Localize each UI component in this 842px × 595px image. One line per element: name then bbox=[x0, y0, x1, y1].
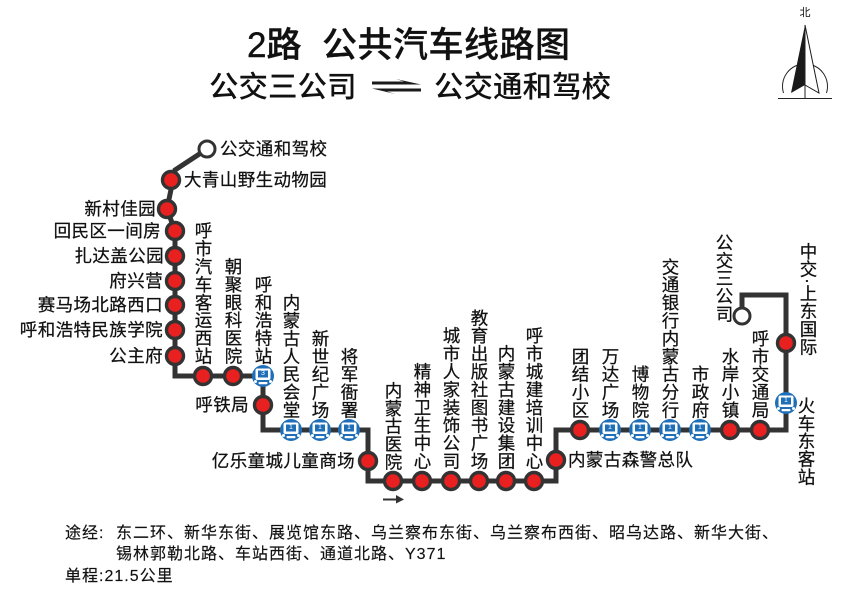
station: 万达广场: 万达广场 bbox=[600, 347, 620, 419]
station: 火车东客站: 火车东客站 bbox=[796, 396, 816, 486]
station: 内蒙古森警总队: 内蒙古森警总队 bbox=[568, 450, 693, 470]
terminal: 公交三公司: 公交三公司 bbox=[714, 234, 734, 323]
station: 中交·上东国际: 中交·上东国际 bbox=[798, 242, 818, 356]
route streets: 东二环、新华东街、展览馆东路、乌兰察布东街、乌兰察布西街、昭乌达路、新华大街、 bbox=[116, 524, 779, 542]
station: 赛马场北路西口: 赛马场北路西口 bbox=[38, 295, 163, 315]
station: 中交·上东国际 bbox=[778, 242, 818, 356]
station: 将军衙署 bbox=[338, 347, 360, 441]
station: 新世纪广场: 新世纪广场 bbox=[310, 330, 330, 419]
arrow: two-way direction bbox=[372, 79, 421, 94]
terminal: 公交三公司 bbox=[714, 234, 750, 324]
station: 新世纪广场: 1 bbox=[318, 424, 322, 431]
station: 博物院: 博物院 bbox=[630, 365, 650, 419]
station: 精神卫生中心: 精神卫生中心 bbox=[412, 363, 432, 470]
station: 教育出版社图书广场: 教育出版社图书广场 bbox=[469, 309, 489, 470]
station: 内蒙古医院: 内蒙古医院 bbox=[383, 382, 403, 471]
station: 内蒙古人民会堂: 1 bbox=[289, 424, 293, 431]
route streets: 锡林郭勒北路、车站西街、通道北路、Y371 bbox=[116, 545, 446, 563]
icon: north compass: 北 bbox=[800, 6, 810, 19]
route line bbox=[167, 149, 786, 481]
station: 大青山野生动物园: 大青山野生动物园 bbox=[184, 170, 327, 190]
icon: north compass bbox=[778, 6, 832, 99]
station: 朝聚眼科医院: 朝聚眼科医院 bbox=[223, 258, 243, 365]
title: 2路 bbox=[247, 26, 301, 65]
station: 回民区一间房: 回民区一间房 bbox=[54, 221, 161, 241]
station: 市政府 bbox=[689, 365, 711, 441]
station: 内蒙古建设集团: 内蒙古建设集团 bbox=[496, 345, 516, 470]
station: 博物院: 1 bbox=[638, 424, 642, 431]
station: 呼和浩特民族学院: 呼和浩特民族学院 bbox=[20, 320, 163, 340]
station: 公主府: 公主府 bbox=[109, 346, 163, 366]
station: 万达广场 bbox=[599, 347, 621, 441]
station: 扎达盖公园: 扎达盖公园 bbox=[74, 246, 164, 266]
station: 交通银行内蒙古分行: 1 bbox=[668, 424, 672, 431]
route streets bbox=[65, 524, 779, 563]
station: 团结小区: 团结小区 bbox=[570, 347, 590, 419]
subtitle: terminal one: 公交三公司 bbox=[209, 71, 357, 104]
station: 呼市交通局: 呼市交通局 bbox=[750, 330, 770, 419]
direction arrow bbox=[383, 495, 404, 504]
station: 火车东客站: 1 bbox=[784, 397, 788, 404]
station: 城市人家装饰公司: 城市人家装饰公司 bbox=[441, 327, 461, 470]
station: 水岸小镇: 水岸小镇 bbox=[720, 347, 740, 419]
station: 内蒙古人民会堂: 内蒙古人民会堂 bbox=[281, 294, 301, 419]
terminal: 公交通和驾校: 公交通和驾校 bbox=[220, 139, 327, 159]
station: 万达广场: 1 bbox=[608, 424, 612, 431]
station: 火车东客站 bbox=[775, 392, 816, 486]
station: 呼市汽车客运西站: 呼市汽车客运西站 bbox=[193, 222, 213, 365]
station: 府兴营: 府兴营 bbox=[109, 271, 163, 291]
subtitle: terminal two: 公交通和驾校 bbox=[434, 71, 611, 104]
station: 将军衙署: 1 bbox=[347, 424, 351, 431]
station: 呼铁局: 呼铁局 bbox=[195, 395, 249, 415]
station: 市政府: 市政府 bbox=[690, 365, 710, 419]
route streets: 途经: bbox=[65, 524, 104, 542]
station: 博物院 bbox=[629, 365, 651, 441]
station: 呼市城建培训中心: 呼市城建培训中心 bbox=[524, 327, 544, 470]
station: 交通银行内蒙古分行: 交通银行内蒙古分行 bbox=[660, 258, 680, 419]
station: 将军衙署: 将军衙署 bbox=[339, 347, 359, 419]
station: 亿乐童城儿童商场: 亿乐童城儿童商场 bbox=[212, 451, 355, 471]
station: 呼和浩特站: 呼和浩特站 bbox=[253, 276, 273, 365]
route distance: 单程:21.5公里 bbox=[65, 567, 174, 585]
title: line name: 公共汽车线路图 bbox=[322, 26, 571, 65]
station: 新村佳园: 新村佳园 bbox=[84, 199, 156, 219]
station: 呼和浩特站: 3 bbox=[261, 370, 265, 377]
station: 市政府: 1 bbox=[698, 424, 702, 431]
